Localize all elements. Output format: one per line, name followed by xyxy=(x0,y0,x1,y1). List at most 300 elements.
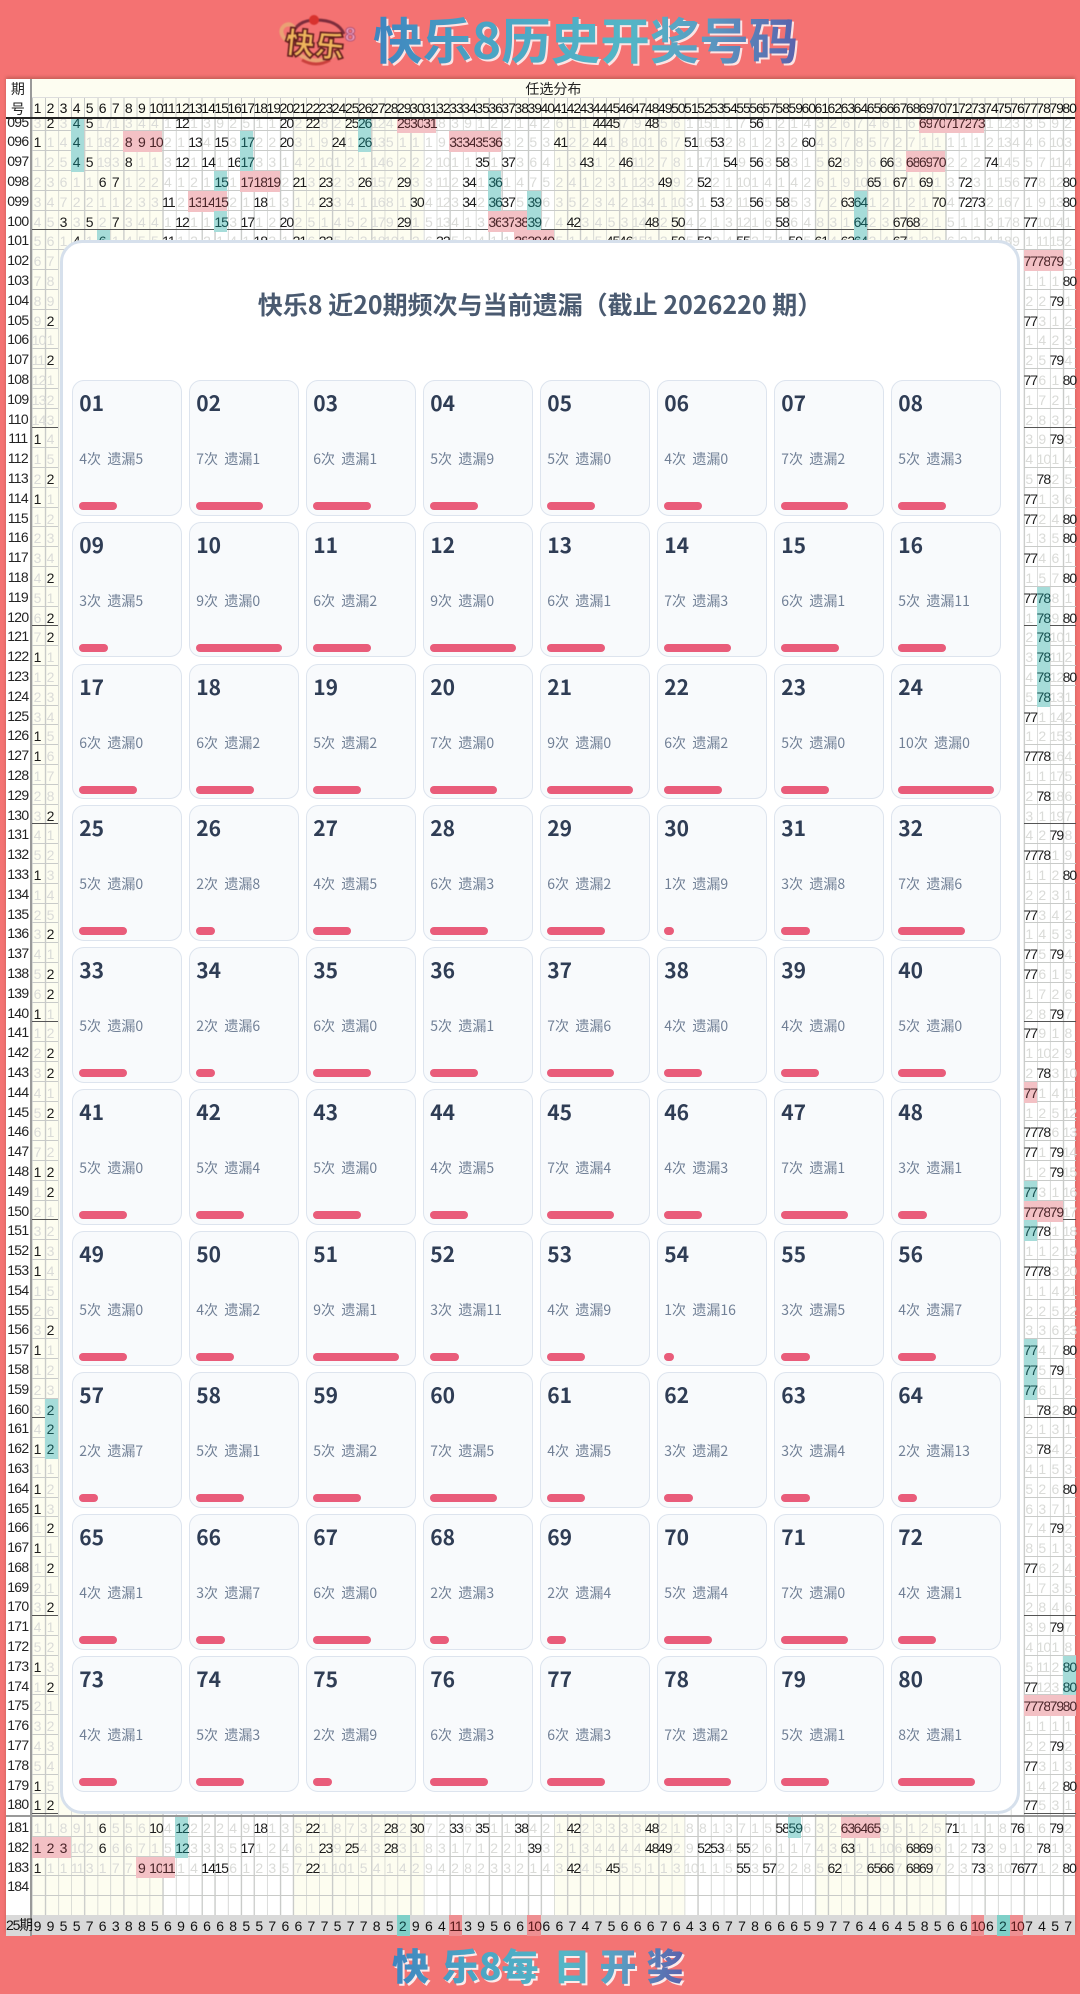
left table columns: period, 1, 2: 2 xyxy=(47,1679,53,1695)
table rows 181 to 185: 5 xyxy=(621,1860,627,1876)
card 73: 4次 遗漏1 xyxy=(79,1725,143,1745)
card 12: 9次 遗漏0 xyxy=(430,591,494,611)
number header row: 68 xyxy=(906,100,919,116)
number cards grid xyxy=(72,380,1001,1792)
right table columns: 77 to 80: 1 xyxy=(1038,1243,1045,1259)
table rows 095 to 101: 1 xyxy=(503,174,510,190)
table rows 095 to 101: 5 xyxy=(34,233,40,249)
card 63: 3次 遗漏4 xyxy=(781,1441,845,1461)
table footer: 25-period totals: 9 xyxy=(47,1918,53,1934)
card 56: 4次 遗漏7 xyxy=(898,1300,962,1320)
table rows 095 to 101: 53 xyxy=(710,134,724,150)
right table columns: 77 to 80: 4 xyxy=(1051,1441,1058,1457)
card 48: 48 xyxy=(898,1097,923,1127)
card 58 xyxy=(189,1372,299,1508)
table rows 181 to 185: 9 xyxy=(882,1820,888,1836)
left table columns: period, 1, 2: 1 xyxy=(34,1481,40,1497)
table footer: 25-period totals: 6 xyxy=(516,1918,523,1934)
left table columns: period, 1, 2 xyxy=(7,251,58,1815)
table rows 095 to 101: 097 xyxy=(7,153,28,169)
table rows 095 to 101: 38 xyxy=(514,214,528,230)
right table columns: 77 to 80 xyxy=(1024,250,1077,1814)
card 42 xyxy=(189,1089,299,1225)
right table columns: 77 to 80: 78 xyxy=(1037,1263,1050,1279)
table rows 181 to 185: 4 xyxy=(529,1820,536,1836)
right table columns: 77 to 80: 80 xyxy=(1063,669,1076,685)
right table columns: 77 to 80: 5 xyxy=(1038,946,1045,962)
table rows 095 to 101: 61 xyxy=(814,233,828,249)
table rows 095 to 101: 6 xyxy=(386,154,393,170)
table rows 095 to 101: 1 xyxy=(268,194,275,210)
table rows 095 to 101: 5 xyxy=(425,214,432,230)
left table columns: period, 1, 2: 2 xyxy=(47,1599,53,1615)
right table columns: 77 to 80: 77 xyxy=(1024,1184,1037,1200)
table rows 095 to 101: 1 xyxy=(647,134,654,150)
left table columns: period, 1, 2: 5 xyxy=(34,1758,40,1774)
table rows 095 to 101: 80 xyxy=(1062,194,1076,210)
card 06 xyxy=(657,380,767,516)
right table columns: 77 to 80: 2 xyxy=(1051,1659,1058,1675)
right table columns: 77 to 80: 1 xyxy=(1051,1758,1058,1774)
table rows 095 to 101: 3 xyxy=(451,194,458,210)
left table columns: period, 1, 2: 2 xyxy=(47,1402,53,1418)
table rows 095 to 101: 1 xyxy=(986,174,993,190)
card 59 xyxy=(306,1372,416,1508)
table rows 095 to 101: 1 xyxy=(308,134,314,150)
table rows 095 to 101: 2 xyxy=(725,194,732,210)
left table columns: period, 1, 2: 1 xyxy=(47,946,53,962)
table rows 181 to 185: 10 xyxy=(149,1820,163,1836)
card 23: 23 xyxy=(781,672,806,702)
table rows 095 to 101: 1 xyxy=(895,194,901,210)
table rows 181 to 185: 6 xyxy=(803,1820,810,1836)
table rows 181 to 185: 15 xyxy=(214,1860,228,1876)
table rows 095 to 101: 5 xyxy=(386,134,393,150)
right table columns: 77 to 80: 1 xyxy=(1025,1778,1032,1794)
table rows 095 to 101: 1 xyxy=(934,134,941,150)
card 34: 2次 遗漏6 xyxy=(196,1016,260,1036)
left table columns: period, 1, 2: 143 xyxy=(7,1064,28,1080)
table rows 181 to 185: 2 xyxy=(921,1820,928,1836)
table rows 095 to 101: 1 xyxy=(451,154,458,170)
table rows 095 to 101: 3 xyxy=(138,194,145,210)
left table columns: period, 1, 2: 2 xyxy=(34,1698,40,1714)
table rows 181 to 185: 4 xyxy=(229,1820,236,1836)
table rows 095 to 101: 3 xyxy=(412,174,419,190)
right table columns: 77 to 80: 4 xyxy=(1065,946,1071,962)
left table columns: period, 1, 2: 2 xyxy=(47,986,53,1002)
left table columns: period, 1, 2: 1 xyxy=(34,1263,40,1279)
right table columns: 77 to 80: 1 xyxy=(1025,1718,1032,1734)
table rows 095 to 101: 2 xyxy=(412,154,419,170)
card 67: 6次 遗漏0 xyxy=(313,1583,377,1603)
left table columns: period, 1, 2: 2 xyxy=(47,313,53,329)
table rows 181 to 185: 7 xyxy=(425,1820,432,1836)
table rows 095 to 101: 3 xyxy=(595,194,601,210)
table footer: 25-period totals: 9 xyxy=(34,1918,40,1934)
table rows 095 to 101: 70 xyxy=(932,194,946,210)
card 63: 63 xyxy=(781,1380,806,1410)
card 55: 55 xyxy=(781,1239,806,1269)
table rows 095 to 101: 1 xyxy=(112,114,119,130)
table rows 095 to 101: 21 xyxy=(293,233,306,249)
table rows 095 to 101: 3 xyxy=(73,214,80,230)
left table columns: period, 1, 2: 1 xyxy=(47,1006,53,1022)
card 80: 80 xyxy=(898,1664,923,1694)
card 70: 70 xyxy=(664,1522,689,1552)
right table columns: 77 to 80: 5 xyxy=(1051,530,1058,546)
right table columns: 77 to 80: 3 xyxy=(1025,431,1032,447)
table rows 181 to 185: 2 xyxy=(856,1860,862,1876)
table rows 181 to 185: 1 xyxy=(1012,1840,1019,1856)
table rows 095 to 101: 4 xyxy=(60,134,66,150)
table rows 095 to 101: 49 xyxy=(658,174,672,190)
right table columns: 77 to 80: 7 xyxy=(1025,1520,1032,1536)
table rows 095 to 101: 13 xyxy=(188,134,202,150)
table rows 095 to 101: 1 xyxy=(190,114,197,130)
right table columns: 77 to 80: 4 xyxy=(1025,669,1032,685)
table rows 181 to 185: 3 xyxy=(190,1840,197,1856)
table rows 095 to 101: 22 xyxy=(306,114,319,130)
table rows 095 to 101: 37 xyxy=(501,214,515,230)
table rows 181 to 185: 10 xyxy=(997,1860,1011,1876)
table rows 181 to 185: 9 xyxy=(334,1840,340,1856)
table rows 095 to 101: 7 xyxy=(816,194,823,210)
left table columns: period, 1, 2: 172 xyxy=(7,1638,28,1654)
left table columns: period, 1, 2: 5 xyxy=(47,728,53,744)
card 15: 15 xyxy=(781,530,806,560)
table rows 095 to 101: 4 xyxy=(582,233,588,249)
table rows 181 to 185: 1 xyxy=(177,1860,184,1876)
card 77: 6次 遗漏3 xyxy=(547,1725,611,1745)
table rows 095 to 101: 2 xyxy=(268,214,275,230)
table rows 095 to 101: 11 xyxy=(736,194,749,210)
table rows 095 to 101: 1 xyxy=(895,114,901,130)
table rows 095 to 101: 3 xyxy=(829,214,836,230)
right table columns: 77 to 80: 4 xyxy=(1038,926,1045,942)
card 21: 9次 遗漏0 xyxy=(547,733,611,753)
left table columns: period, 1, 2: 1 xyxy=(34,1025,40,1041)
table rows 095 to 101: 50 xyxy=(671,214,685,230)
card 73: 73 xyxy=(79,1664,104,1694)
card 13: 13 xyxy=(547,530,572,560)
table rows 095 to 101: 70 xyxy=(932,114,946,130)
table rows 181 to 185: 3 xyxy=(373,1840,380,1856)
table rows 181 to 185: 1 xyxy=(412,1840,419,1856)
table rows 095 to 101: 5 xyxy=(86,154,93,170)
table rows 095 to 101: 4 xyxy=(986,233,993,249)
table rows 181 to 185: 1 xyxy=(842,1860,849,1876)
table rows 095 to 101: 12 xyxy=(371,114,384,130)
right table columns: 77 to 80: 8 xyxy=(1065,827,1071,843)
table footer: 25-period totals: 6 xyxy=(555,1918,562,1934)
table rows 095 to 101: 15 xyxy=(997,174,1011,190)
table rows 181 to 185: 23 xyxy=(319,1840,332,1856)
card 77 xyxy=(540,1656,650,1792)
table rows 095 to 101: 1 xyxy=(960,214,967,230)
right table columns: 77 to 80: 1 xyxy=(1065,1362,1071,1378)
number header row: 37 xyxy=(501,100,515,116)
card 46: 46 xyxy=(664,1097,689,1127)
table rows 181 to 185: 5 xyxy=(229,1840,236,1856)
card 39 xyxy=(774,947,884,1083)
table rows 181 to 185: 2 xyxy=(1064,1820,1071,1836)
number header row: 54 xyxy=(723,100,737,116)
right table columns: 77 to 80: 77 xyxy=(1024,1263,1037,1279)
right table columns: 77 to 80: 78 xyxy=(1037,1402,1050,1418)
card 76: 76 xyxy=(430,1664,455,1694)
right table columns: 77 to 80: 7 xyxy=(1038,392,1045,408)
table rows 095 to 101: 3 xyxy=(921,233,928,249)
left table columns: period, 1, 2: 2 xyxy=(34,471,40,487)
table rows 181 to 185: 2 xyxy=(216,1820,223,1836)
left table columns: period, 1, 2: 2 xyxy=(47,570,53,586)
table rows 181 to 185: 59 xyxy=(788,1820,802,1836)
table footer: 25-period totals: 5 xyxy=(908,1918,914,1934)
right table columns: 77 to 80: 79 xyxy=(1050,1619,1063,1635)
table rows 095 to 101: 10 xyxy=(671,194,685,210)
table rows 181 to 185: 2 xyxy=(86,1840,93,1856)
table rows 095 to 101: 36 xyxy=(488,214,502,230)
card 18: 6次 遗漏2 xyxy=(196,733,260,753)
table rows 181 to 185: 73 xyxy=(971,1860,985,1876)
card 33: 33 xyxy=(79,955,104,985)
table rows 095 to 101: 5 xyxy=(686,233,693,249)
table rows 095 to 101: 2 xyxy=(294,114,301,130)
table rows 095 to 101: 4 xyxy=(73,134,80,150)
right table columns: 77 to 80: 14 xyxy=(1063,1144,1076,1160)
right table columns: 77 to 80: 79 xyxy=(1050,253,1063,269)
left table columns: period, 1, 2: 1 xyxy=(34,431,40,447)
table rows 095 to 101: 6 xyxy=(47,233,53,249)
table rows 095 to 101: 77 xyxy=(1023,174,1037,190)
table rows 095 to 101: 56 xyxy=(749,194,763,210)
table rows 095 to 101: 12 xyxy=(632,174,645,190)
table rows 181 to 185: 5 xyxy=(934,1820,941,1836)
right table columns: 77 to 80: 5 xyxy=(1051,1303,1058,1319)
table rows 181 to 185: 1 xyxy=(242,1860,249,1876)
left table columns: period, 1, 2: 3 xyxy=(47,867,53,883)
table rows 095 to 101: 36 xyxy=(488,134,502,150)
left table columns: period, 1, 2: 124 xyxy=(7,688,28,704)
table rows 095 to 101: 5 xyxy=(660,114,667,130)
table rows 181 to 185: 1 xyxy=(347,1860,353,1876)
table rows 095 to 101: 9 xyxy=(1051,114,1058,130)
right table columns: 77 to 80: 1 xyxy=(1025,570,1032,586)
table rows 181 to 185 xyxy=(6,1815,1075,1916)
table rows 095 to 101: 4 xyxy=(725,233,732,249)
card 44: 4次 遗漏5 xyxy=(430,1158,494,1178)
table rows 095 to 101: 11 xyxy=(1036,233,1049,249)
table rows 095 to 101: 5 xyxy=(568,194,575,210)
table rows 095 to 101: 3 xyxy=(281,194,288,210)
table rows 095 to 101: 1 xyxy=(686,154,693,170)
right table columns: 77 to 80: 2 xyxy=(1065,313,1071,329)
table rows 181 to 185: 49 xyxy=(658,1840,672,1856)
table footer: 25-period totals: 4 xyxy=(686,1918,693,1934)
table rows 095 to 101: 3 xyxy=(686,194,693,210)
number header row: 9 xyxy=(138,100,145,116)
card 33 xyxy=(72,947,182,1083)
table rows 095 to 101: 18 xyxy=(371,233,384,249)
table rows 181 to 185: 66 xyxy=(880,1860,893,1876)
left table columns: period, 1, 2: 2 xyxy=(47,1065,53,1081)
table rows 095 to 101: 13 xyxy=(436,214,450,230)
table rows 181 to 185: 1 xyxy=(308,1840,314,1856)
right table columns: 77 to 80: 5 xyxy=(1038,1797,1045,1813)
number header row: 36 xyxy=(488,100,502,116)
table rows 095 to 101: 1 xyxy=(177,233,184,249)
right table columns: 77 to 80: 1 xyxy=(1025,392,1032,408)
card 31: 3次 遗漏8 xyxy=(781,874,845,894)
right table columns: 77 to 80: 5 xyxy=(1065,966,1071,982)
table rows 095 to 101: 8 xyxy=(842,154,849,170)
left table columns: period, 1, 2: 1 xyxy=(47,1124,53,1140)
table rows 181 to 185: 57 xyxy=(762,1860,776,1876)
left table columns: period, 1, 2: 1 xyxy=(34,1520,40,1536)
table rows 095 to 101: 12 xyxy=(175,214,189,230)
table rows 095 to 101: 4 xyxy=(477,233,484,249)
left table columns: period, 1, 2: 1 xyxy=(34,649,40,665)
table rows 181 to 185: 12 xyxy=(175,1840,189,1856)
right table columns: 77 to 80: 10 xyxy=(1037,1045,1050,1061)
table footer: 25-period totals: 7 xyxy=(660,1918,667,1934)
left table columns: period, 1, 2: 145 xyxy=(7,1104,28,1120)
table rows 095 to 101: 2 xyxy=(451,174,458,190)
card 04: 5次 遗漏9 xyxy=(430,449,494,469)
right table columns: 77 to 80: 77 xyxy=(1024,550,1037,566)
right table columns: 77 to 80: 2 xyxy=(1025,1421,1032,1437)
table rows 181 to 185: 1 xyxy=(973,1820,980,1836)
table rows 095 to 101: 3 xyxy=(947,174,954,190)
left table columns: period, 1, 2: 4 xyxy=(34,1738,40,1754)
right table columns: 77 to 80: 80 xyxy=(1063,610,1076,626)
table rows 095 to 101: 15 xyxy=(1049,233,1063,249)
left table columns: period, 1, 2: 2 xyxy=(47,1322,53,1338)
table rows 095 to 101: 3 xyxy=(34,194,40,210)
left table columns: period, 1, 2: 137 xyxy=(7,945,28,961)
left table columns: period, 1, 2: 1 xyxy=(34,1461,40,1477)
table rows 095 to 101: 23 xyxy=(319,233,332,249)
right table columns: 77 to 80: 5 xyxy=(1051,1461,1058,1477)
table rows 181 to 185: 3 xyxy=(438,1840,445,1856)
number header row: 55 xyxy=(736,100,750,116)
table footer: 25-period totals: 6 xyxy=(621,1918,627,1934)
card 26: 26 xyxy=(196,813,221,843)
card 50 xyxy=(189,1231,299,1366)
left table columns: period, 1, 2: 1 xyxy=(34,867,40,883)
table rows 181 to 185: 69 xyxy=(919,1860,932,1876)
table rows 095 to 101: 24 xyxy=(332,134,345,150)
right table columns: 77 to 80: 6 xyxy=(1065,788,1071,804)
right table columns: 77 to 80: 19 xyxy=(1063,1243,1076,1259)
card 44: 44 xyxy=(430,1097,455,1127)
right table columns: 77 to 80: 79 xyxy=(1050,1362,1063,1378)
right table columns: 77 to 80: 77 xyxy=(1024,1342,1037,1358)
card 38: 4次 遗漏0 xyxy=(664,1016,728,1036)
table rows 095 to 101: 48 xyxy=(645,214,658,230)
left table columns: period, 1, 2: 118 xyxy=(8,569,28,585)
right table columns: 77 to 80: 1 xyxy=(1025,332,1032,348)
table rows 095 to 101: 1 xyxy=(699,194,706,210)
table rows 181 to 185: 4 xyxy=(399,1860,406,1876)
number header row: 53 xyxy=(710,100,724,116)
left table columns: period, 1, 2: 141 xyxy=(7,1024,28,1040)
card 41: 5次 遗漏0 xyxy=(79,1158,143,1178)
table rows 181 to 185: 4 xyxy=(595,1840,601,1856)
table rows 095 to 101: 10 xyxy=(1049,134,1063,150)
table rows 095 to 101: 4 xyxy=(125,233,132,249)
table rows 181 to 185: 4 xyxy=(164,1820,171,1836)
table rows 095 to 101: 15 xyxy=(697,114,711,130)
table rows 095 to 101: 14 xyxy=(997,154,1011,170)
table rows 095 to 101: 9 xyxy=(464,114,471,130)
left table columns: period, 1, 2: 3 xyxy=(47,412,53,428)
table rows 095 to 101: 2 xyxy=(973,154,980,170)
left table columns: period, 1, 2: 2 xyxy=(34,1204,40,1220)
table rows 095 to 101: 2 xyxy=(829,114,836,130)
table rows 095 to 101: 3 xyxy=(829,134,836,150)
card 61: 61 xyxy=(547,1380,572,1410)
right table columns: 77 to 80: 5 xyxy=(1038,1540,1045,1556)
table rows 095 to 101: 11 xyxy=(162,233,175,249)
right table columns: 77 to 80: 77 xyxy=(1024,590,1037,606)
table rows 095 to 101: 1 xyxy=(112,194,119,210)
table footer: 25-period totals: 4 xyxy=(869,1918,875,1934)
right table columns: 77 to 80: 1 xyxy=(1025,926,1032,942)
left table columns: period, 1, 2: 167 xyxy=(7,1539,28,1555)
table rows 095 to 101: 26 xyxy=(358,134,371,150)
card 37 xyxy=(540,947,650,1083)
right table columns: 77 to 80: 16 xyxy=(1063,1184,1076,1200)
table footer: 25-period totals: 5 xyxy=(386,1918,393,1934)
table rows 095 to 101: 10 xyxy=(1036,214,1050,230)
table rows 095 to 101: 3 xyxy=(582,214,588,230)
card 02 xyxy=(189,380,299,516)
card 15: 6次 遗漏1 xyxy=(781,591,845,611)
table footer: 25-period totals: 7 xyxy=(268,1918,275,1934)
table rows 095 to 101: 2 xyxy=(686,174,693,190)
table rows 181 to 185: 8 xyxy=(464,1860,471,1876)
card 57: 2次 遗漏7 xyxy=(79,1441,143,1461)
card 35 xyxy=(306,947,416,1083)
left table columns: period, 1, 2: 6 xyxy=(34,1124,40,1140)
card 53: 4次 遗漏9 xyxy=(547,1300,611,1320)
table rows 095 to 101: 51 xyxy=(684,134,698,150)
left table columns: period, 1, 2: 8 xyxy=(34,293,40,309)
table rows 181 to 185: 1 xyxy=(856,1840,862,1856)
table rows 181 to 185: 10 xyxy=(684,1860,698,1876)
number header row: 18 xyxy=(253,100,267,116)
right table columns: 77 to 80: 77 xyxy=(1024,709,1037,725)
table rows 095 to 101: 1 xyxy=(751,174,758,190)
left table columns: period, 1, 2: 1 xyxy=(47,1698,53,1714)
left table columns: period, 1, 2: 5 xyxy=(34,966,40,982)
table rows 095 to 101: 2 xyxy=(229,114,236,130)
left table columns: period, 1, 2: 14 xyxy=(32,412,45,428)
left table columns: period, 1, 2: 134 xyxy=(7,886,28,902)
table rows 095 to 101: 4 xyxy=(764,174,771,190)
table rows 095 to 101: 12 xyxy=(436,194,450,210)
table rows 181 to 185: 4 xyxy=(281,1840,288,1856)
table rows 095 to 101: 4 xyxy=(608,194,614,210)
card 06: 4次 遗漏0 xyxy=(664,449,728,469)
right table columns: 77 to 80: 4 xyxy=(1025,1461,1032,1477)
card 45: 45 xyxy=(547,1097,572,1127)
number header row: 19 xyxy=(267,100,280,116)
right table columns: 77 to 80: 3 xyxy=(1025,1619,1032,1635)
right table columns: 77 to 80: 7 xyxy=(1038,1580,1045,1596)
